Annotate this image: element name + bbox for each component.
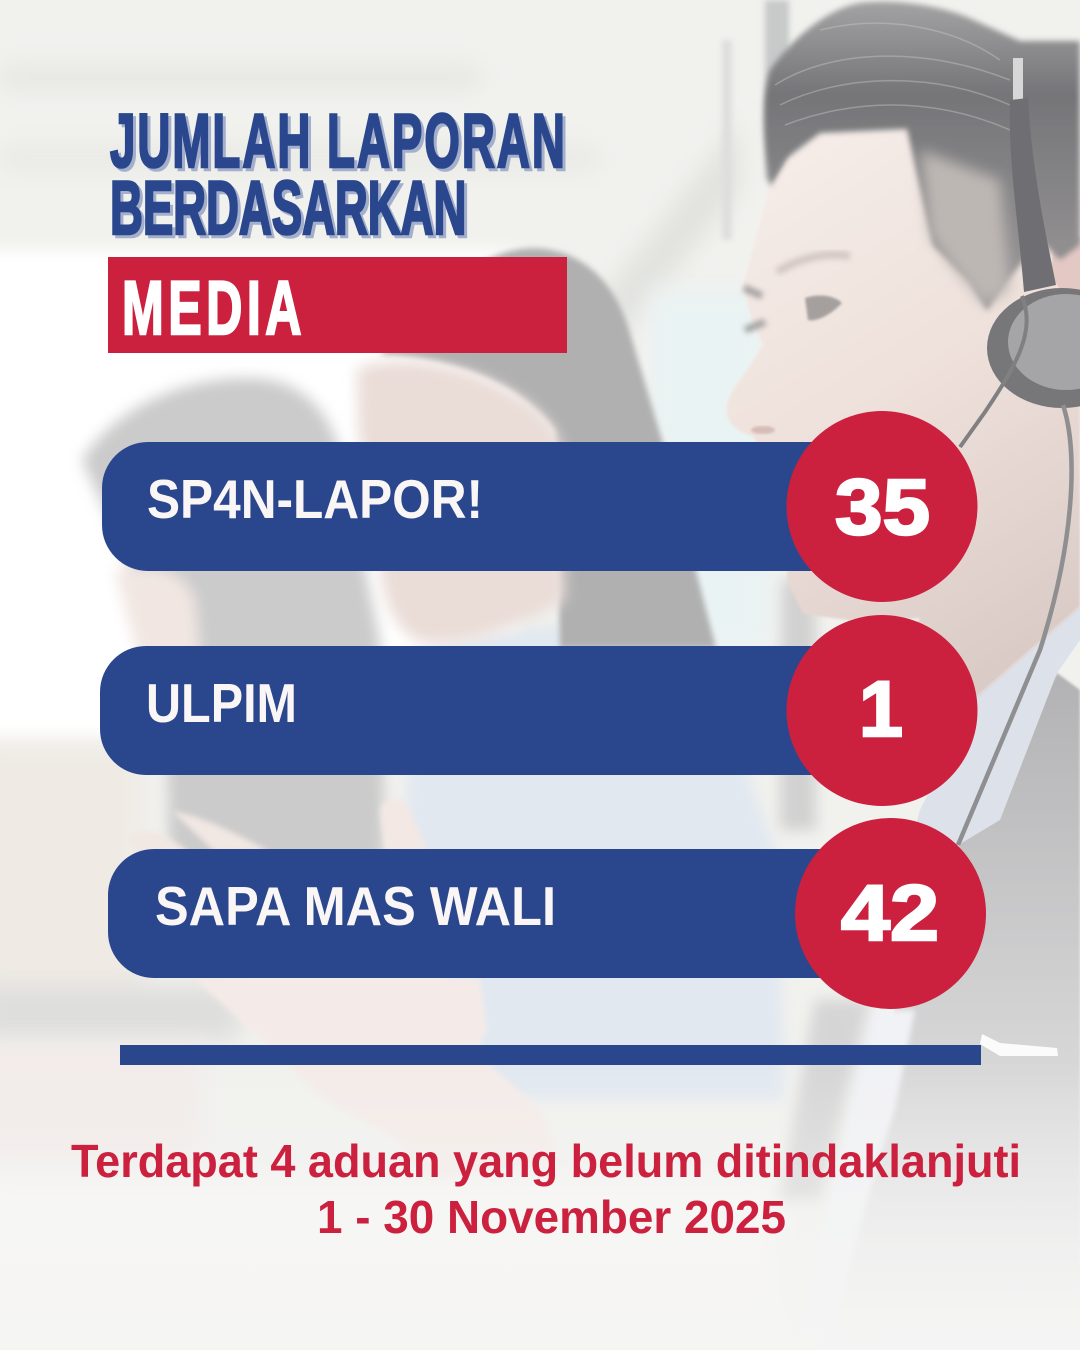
footer note: Terdapat 4 aduan yang belum ditindaklanjuti bbox=[71, 1135, 1021, 1187]
dark pillar behind the man bbox=[722, 0, 789, 240]
row: ULPIM: 1 bbox=[859, 664, 903, 753]
lower pillar bbox=[780, 580, 816, 830]
raised hands bbox=[130, 799, 560, 1180]
title bbox=[110, 99, 568, 254]
bright window area bbox=[0, 250, 520, 740]
background woman: blouse bbox=[400, 626, 785, 1100]
divider bar bbox=[120, 1045, 981, 1065]
man: nostril bbox=[751, 426, 775, 434]
row: SAPA MAS WALI: SAPA MAS WALI bbox=[155, 875, 556, 937]
background woman: face bbox=[357, 361, 565, 644]
man: shirt and tie bbox=[780, 607, 1080, 1340]
footer note: 1 - 30 November 2025 bbox=[317, 1191, 786, 1243]
media banner: MEDIA bbox=[122, 266, 302, 351]
row: SP4N-LAPOR! bbox=[102, 411, 978, 602]
title: BERDASARKAN bbox=[113, 169, 469, 254]
background woman in hijab bbox=[82, 378, 385, 880]
media banner bbox=[108, 257, 567, 353]
man: headset bbox=[958, 58, 1080, 845]
row: SP4N-LAPOR!: SP4N-LAPOR! bbox=[147, 468, 483, 530]
row: SAPA MAS WALI bbox=[108, 818, 986, 1009]
row: ULPIM bbox=[100, 615, 978, 806]
background woman: hair bbox=[380, 248, 716, 648]
bottom fade bbox=[0, 1060, 1080, 1350]
ceiling bands bbox=[0, 65, 740, 340]
lower left desk tones bbox=[0, 745, 140, 995]
teal window glow bbox=[650, 290, 770, 650]
man: eye and brow bbox=[744, 255, 850, 330]
title: BERDASARKAN bbox=[110, 166, 466, 251]
row: SAPA MAS WALI: 42 bbox=[841, 868, 939, 957]
title: JUMLAH LAPORAN bbox=[110, 99, 565, 184]
title: JUMLAH LAPORAN bbox=[113, 102, 568, 187]
man: face and neck bbox=[727, 129, 1080, 760]
man: hair bbox=[764, 2, 1080, 311]
row: SP4N-LAPOR!: 35 bbox=[835, 462, 930, 551]
row: ULPIM: ULPIM bbox=[146, 672, 297, 734]
footer note bbox=[71, 1135, 1021, 1243]
man: suit bbox=[820, 673, 1080, 1350]
man: ear bbox=[1052, 235, 1080, 295]
